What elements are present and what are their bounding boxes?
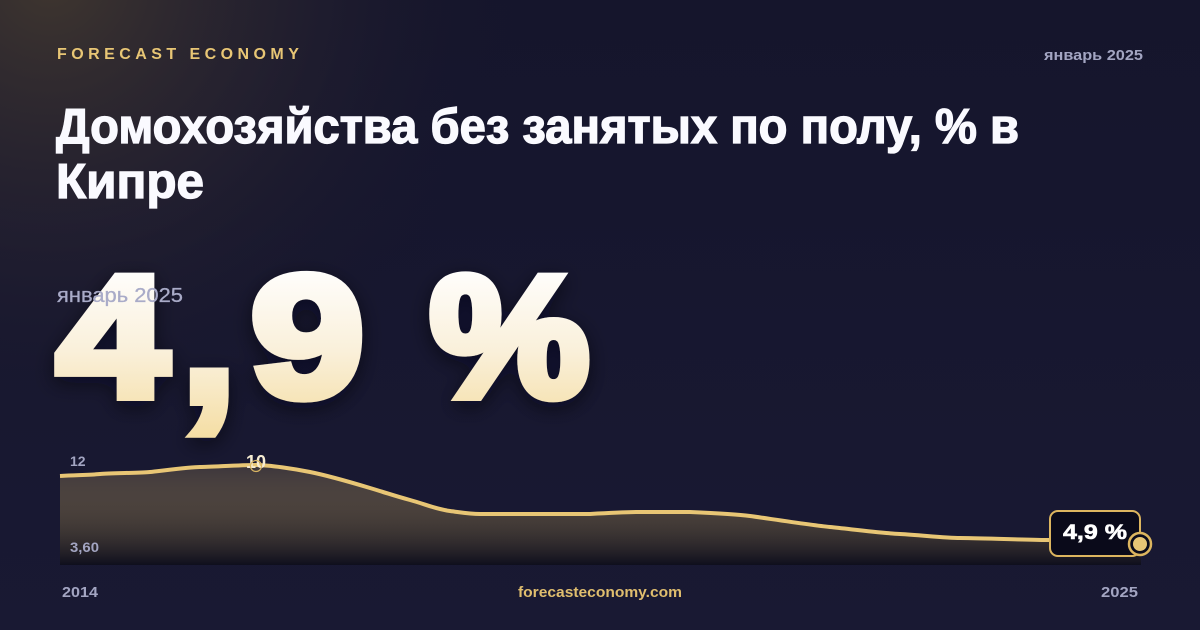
axis max label: 12 (70, 453, 86, 469)
peak label: 10 (246, 452, 266, 472)
big value: 4 (57, 241, 168, 433)
current value badge: 4,9 % (1063, 521, 1127, 544)
start year: 2014 (62, 584, 99, 601)
chart line (60, 465, 1141, 540)
end marker (1129, 533, 1151, 555)
big value (57, 217, 589, 446)
axis min label: 3,60 (70, 539, 99, 555)
end year: 2025 (1101, 584, 1138, 601)
brand label: FORECAST ECONOMY (57, 46, 303, 63)
title: Домохозяйства без занятых по полу, % в (56, 100, 1019, 154)
current value badge (1050, 511, 1140, 556)
peak marker (250, 460, 262, 472)
big value: , (179, 217, 239, 446)
source url: forecasteconomy.com (518, 584, 682, 601)
title: Кипре (56, 155, 204, 209)
subtitle date over value: январь 2025 (57, 285, 183, 307)
big value: 9 (251, 241, 364, 433)
chart area fill (60, 465, 1141, 565)
date top right: январь 2025 (1044, 47, 1143, 64)
big value: % (430, 241, 589, 433)
title (56, 100, 1019, 209)
area chart (60, 465, 1141, 565)
